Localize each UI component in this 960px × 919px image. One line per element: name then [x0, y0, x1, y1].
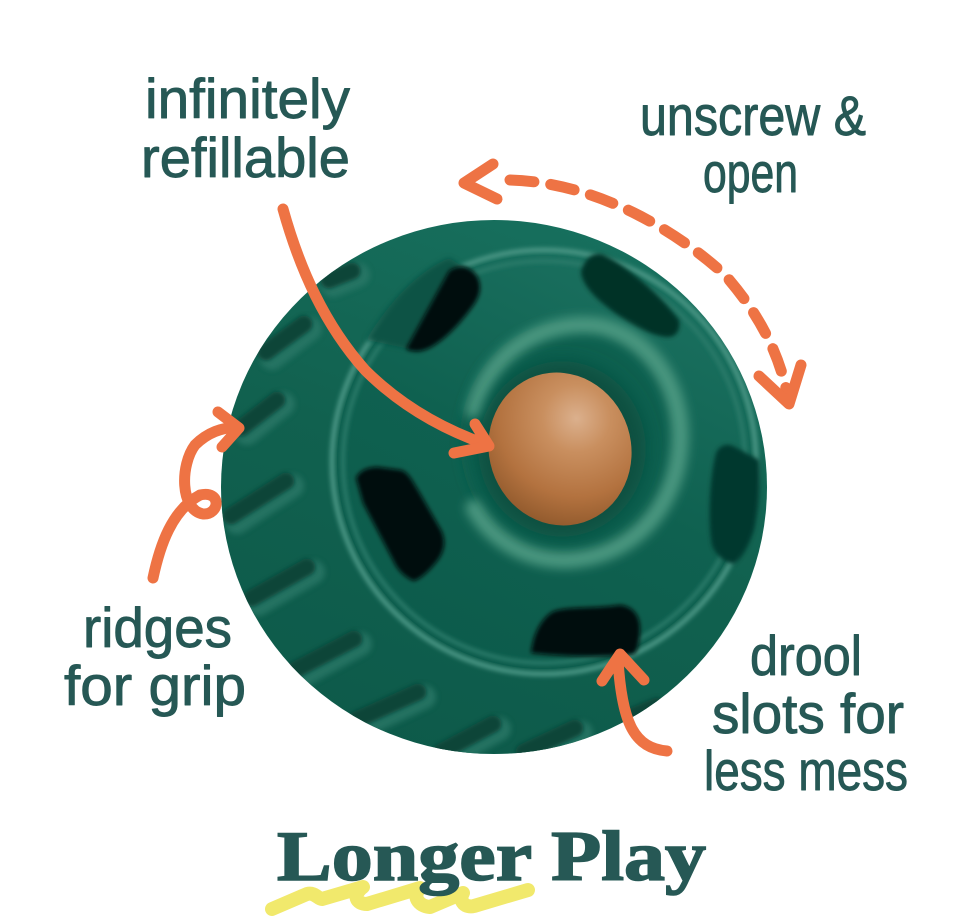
toy ball illustration: [221, 220, 767, 757]
arrow: unscrew and open, dashed: [464, 164, 801, 404]
arrow: drool slots: [602, 654, 667, 751]
label: infinitely refillable: infinitely: [145, 67, 350, 130]
hole bottom: [531, 605, 640, 656]
kibble treat: [469, 354, 651, 544]
hole top right: [581, 254, 679, 337]
hole left: [356, 467, 444, 581]
arrow: ridges for grip: [153, 412, 239, 578]
label: unscrew and open: [640, 84, 866, 204]
hole right: [710, 445, 760, 564]
arrow: infinitely refillable to treat: [283, 209, 489, 453]
title: Longer Play: [277, 818, 706, 896]
hole top left: [406, 267, 480, 351]
label: infinitely refillable: [141, 67, 350, 189]
label: drool slots for less mess: [704, 624, 908, 802]
label: ridges for grip: ridges: [83, 596, 232, 659]
grip ridges: [231, 271, 657, 757]
label: drool slots for less mess: slots for: [712, 682, 904, 745]
label: ridges for grip: for grip: [64, 654, 246, 717]
ball body: [221, 220, 767, 754]
label: drool slots for less mess: drool: [750, 624, 862, 687]
hole shelf top left: [366, 258, 470, 351]
label: unscrew and open: unscrew &: [640, 84, 866, 147]
label: ridges for grip: [64, 596, 246, 717]
yellow squiggle underline: [272, 887, 528, 909]
label: infinitely refillable: refillable: [141, 126, 350, 189]
raised rim: [332, 250, 756, 674]
inner disc: [337, 255, 751, 669]
label: drool slots for less mess: less mess: [704, 739, 908, 802]
label: unscrew and open: open: [703, 141, 798, 204]
central donut: [460, 322, 680, 560]
